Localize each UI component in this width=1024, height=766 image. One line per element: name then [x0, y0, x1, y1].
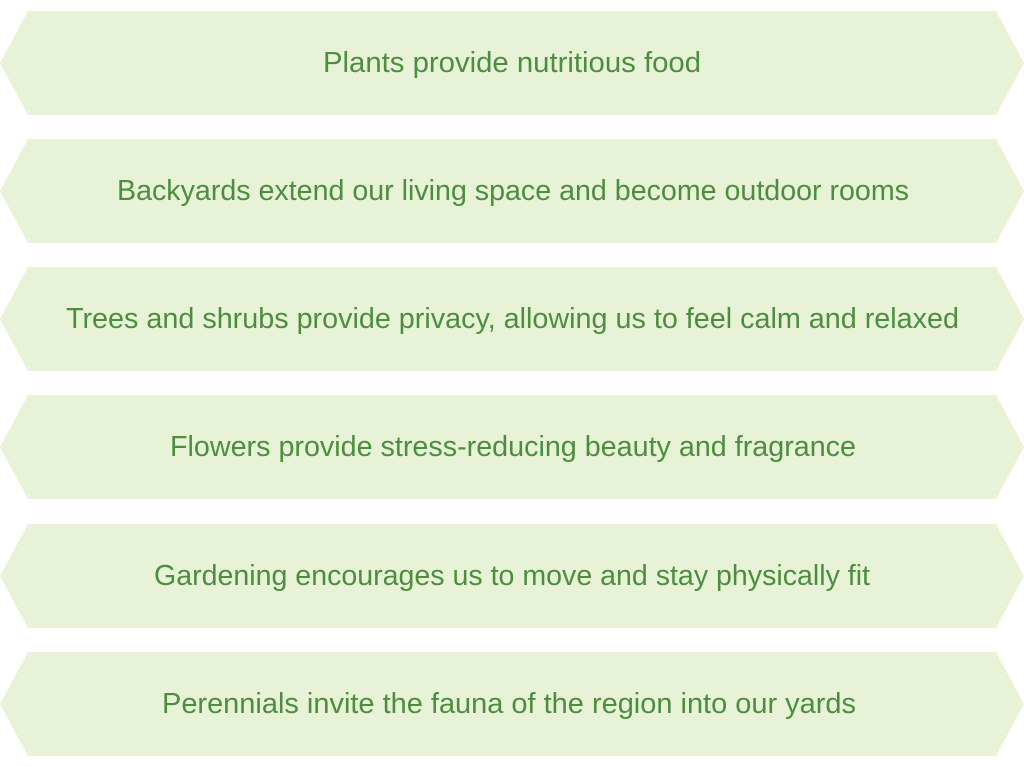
banner: outdoor rooms [0, 139, 1024, 243]
banner: privacy [0, 267, 1024, 371]
banner: regional fauna [0, 652, 1024, 756]
banner: beauty and fragrance: Flowers provide stress-reducing beauty and fragrance [170, 431, 856, 463]
banner: privacy: Trees and shrubs provide privacy, allowing us to feel calm and relaxed [66, 303, 959, 335]
banner: nutritious food [0, 11, 1024, 115]
banner: regional fauna: Perennials invite the fauna of the region into our yards [162, 688, 856, 720]
banner: nutritious food: Plants provide nutritious food [323, 47, 701, 79]
banner: beauty and fragrance [0, 395, 1024, 499]
banner: physically fit: Gardening encourages us to move and stay physically fit [154, 560, 870, 592]
banner: outdoor rooms: Backyards extend our living space and become outdoor rooms [117, 175, 909, 207]
banner: physically fit [0, 524, 1024, 628]
